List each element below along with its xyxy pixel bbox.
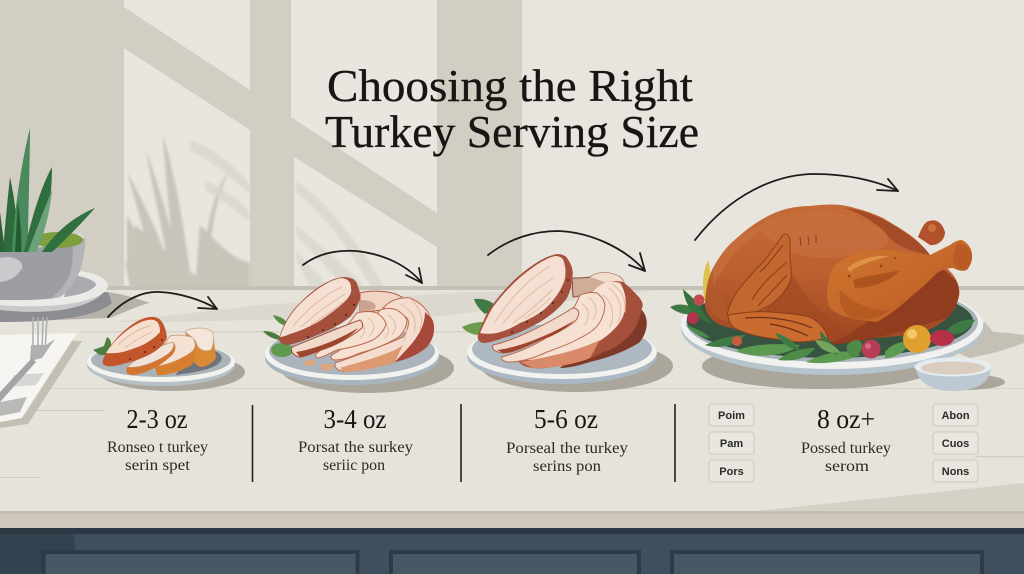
- label: 2-3 oz: 2-3 oz: [126, 404, 188, 434]
- left tag column: Pors: [719, 466, 744, 478]
- icon: potted plant on saucer: [0, 128, 150, 322]
- label: 3-4 oz: [298, 404, 413, 474]
- plate 3: large sliced turkey: [462, 254, 673, 392]
- label: 5-6 oz: [506, 404, 628, 475]
- platter: whole roast turkey with garnish: [670, 204, 1024, 389]
- arrow 4: [695, 174, 898, 240]
- title: [325, 60, 699, 157]
- label: 5-6 oz: 5-6 oz: [534, 404, 598, 434]
- icon: fork on napkin: [0, 317, 82, 428]
- left tag column: Poim: [718, 410, 745, 422]
- title: Turkey Serving Size: [325, 106, 699, 157]
- plate 1: small sliced turkey: [87, 317, 245, 391]
- label: 3-4 oz: Porsat the surkey: [298, 439, 413, 456]
- left tag column: [709, 404, 754, 482]
- navy cabinet: [0, 528, 1024, 574]
- label: 5-6 oz: serins pon: [533, 458, 601, 475]
- title: Choosing the Right: [327, 60, 693, 111]
- label: 2-3 oz: Ronseo t turkey: [107, 439, 208, 456]
- arrow 1: [108, 292, 217, 317]
- arrow 3: [488, 231, 645, 271]
- icon: gravy bowl: [914, 358, 1005, 391]
- label: 8 oz+: 8 oz+: [817, 404, 875, 434]
- countertop: [0, 290, 1024, 528]
- label: 3-4 oz: seriic pon: [323, 457, 385, 474]
- label: 5-6 oz: Porseal the turkey: [506, 440, 628, 457]
- right tag column: [933, 404, 978, 482]
- wall background with window shadows: [0, 0, 1024, 292]
- right tag column: Nons: [942, 466, 969, 478]
- label: 8 oz+: Possed turkey: [801, 440, 891, 457]
- plate 2: medium sliced turkey: [263, 277, 454, 393]
- left tag column: Pam: [720, 438, 743, 450]
- label: 3-4 oz: 3-4 oz: [324, 404, 387, 434]
- label: 2-3 oz: serin spet: [125, 457, 191, 474]
- label: 8 oz+: serom: [825, 458, 869, 475]
- label: 8 oz+: [801, 404, 891, 475]
- right tag column: Cuos: [942, 438, 969, 450]
- divider lines: [252, 404, 675, 482]
- right tag column: Abon: [941, 410, 970, 422]
- label: 2-3 oz: [107, 404, 208, 474]
- arrow 2: [303, 251, 422, 283]
